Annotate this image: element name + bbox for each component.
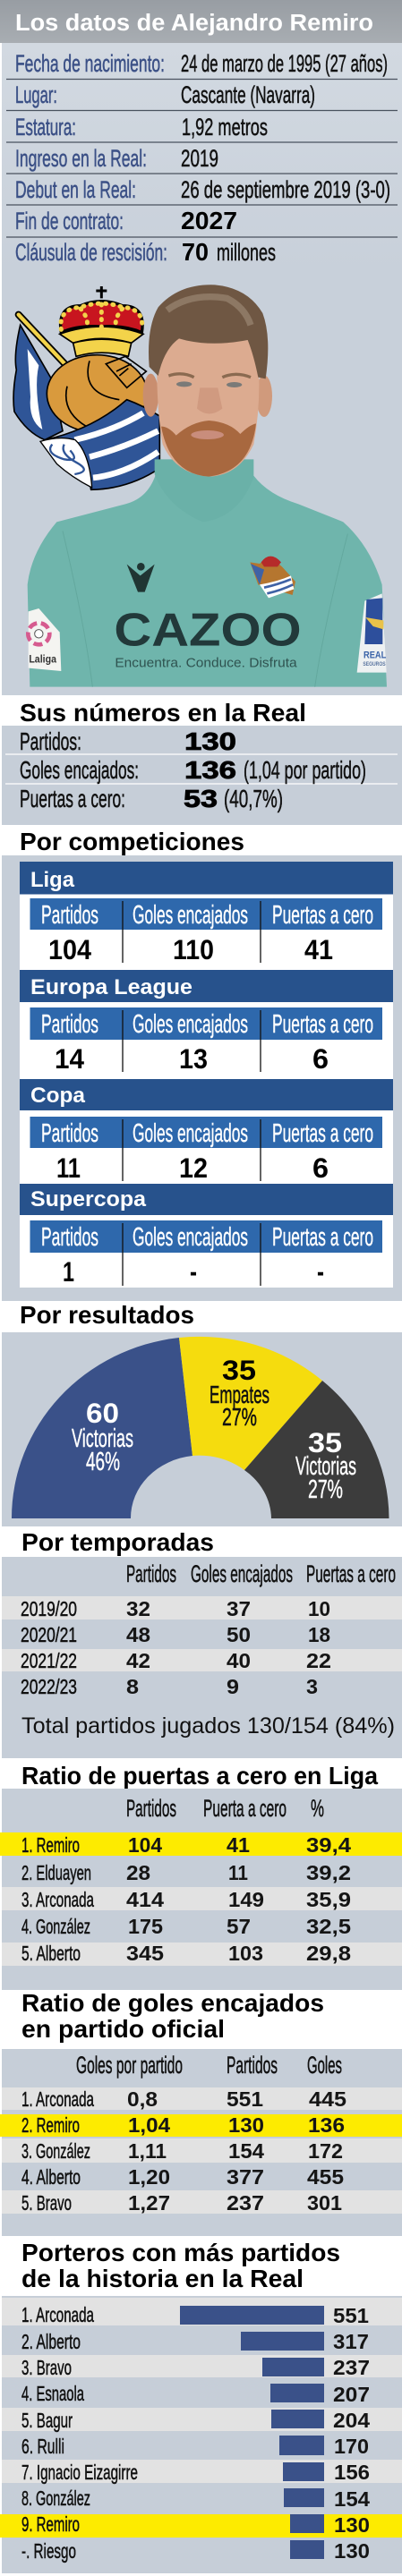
- panel: most appearances bar chart: 204: [333, 2409, 370, 2432]
- panel: player data: Ingreso en la Real:: [15, 145, 147, 172]
- panel: goals conceded ratio table: 3. González: [21, 2139, 90, 2163]
- section heading: Por temporadas: Por temporadas: [21, 1528, 214, 1556]
- panel: career numbers: Partidos:: [20, 727, 81, 755]
- panel: clean sheet ratio table: 39,2: [306, 1861, 351, 1884]
- panel: clean sheet ratio table: 3. Arconada: [21, 1888, 94, 1911]
- chart segment: derrotas: 35: [308, 1426, 342, 1458]
- panel: goals conceded ratio table: 154: [228, 2139, 264, 2163]
- panel: clean sheet ratio table: 103: [228, 1942, 263, 1965]
- panel: goals conceded ratio table: Partidos: [227, 2052, 278, 2079]
- panel: most appearances bar chart: 6. Rulli: [21, 2435, 64, 2458]
- panel: goals conceded ratio table: 1,27: [128, 2191, 170, 2215]
- panel: most appearances bar chart: 5. Bagur: [21, 2409, 73, 2432]
- table: Europa League: Europa League: [30, 975, 192, 999]
- table: Europa League: [20, 970, 393, 1075]
- panel: player data: Fin de contrato:: [15, 208, 124, 234]
- chart segment: victorias: 60: [86, 1397, 119, 1429]
- panel: player data: 2019: [181, 145, 218, 172]
- table: Supercopa: Partidos: [41, 1223, 98, 1252]
- panel: player data: 2027: [181, 207, 237, 234]
- panel: seasons table: 37: [227, 1597, 251, 1620]
- panel: seasons table: Goles encajados: [191, 1560, 293, 1587]
- panel: clean sheet ratio table: Puerta a cero: [203, 1795, 287, 1822]
- panel: seasons table: Total partidos jugados 130/154 (84%): [21, 1713, 395, 1739]
- table: Europa League: Goles encajados: [133, 1010, 248, 1039]
- section heading: Sus numeros en la Real: Sus números en la Real: [20, 699, 306, 727]
- panel: seasons table: Partidos: [126, 1560, 176, 1587]
- panel: clean sheet ratio table: 345: [126, 1942, 164, 1965]
- panel: player data: [2, 43, 402, 695]
- panel: goals conceded ratio table: 4. Alberto: [21, 2165, 81, 2189]
- panel: goals conceded ratio table: 1,20: [128, 2165, 170, 2189]
- table: Liga: 41: [304, 933, 333, 965]
- panel: most appearances bar chart: 170: [334, 2435, 369, 2458]
- table: Supercopa: -: [190, 1255, 197, 1288]
- panel: goals conceded ratio table: 5. Bravo: [21, 2191, 72, 2215]
- panel: goals conceded ratio table: 237: [227, 2191, 264, 2215]
- panel: seasons table: 48: [126, 1623, 150, 1646]
- chart segment: derrotas: [244, 1381, 389, 1518]
- table: Supercopa: Supercopa: [30, 1187, 146, 1211]
- panel: clean sheet ratio table: [0, 1789, 402, 1990]
- panel: career numbers: 136: [184, 756, 236, 784]
- icon: macron logo: [127, 565, 155, 592]
- section heading: Ratio de goles encajados: Ratio de goles encajados: [21, 1989, 324, 2017]
- table: Copa: 6: [312, 1152, 329, 1184]
- table: Europa League: 6: [312, 1042, 329, 1075]
- panel: seasons table: 2021/22: [21, 1649, 77, 1672]
- table: Copa: Partidos: [41, 1119, 98, 1148]
- bars: [180, 2306, 324, 2559]
- panel: clean sheet ratio table: 35,9: [306, 1888, 351, 1911]
- illustration: club crest and player: [13, 285, 387, 687]
- panel: career numbers: (40,7%): [224, 785, 283, 812]
- panel: goals conceded ratio table: 172: [308, 2139, 343, 2163]
- section heading: Ratio de puertas a cero en Liga: Ratio de puertas a cero en Liga: [21, 1762, 379, 1790]
- panel: career numbers: [2, 726, 402, 825]
- panel: seasons table: 8: [126, 1675, 139, 1698]
- panel: clean sheet ratio table: 39,4: [306, 1833, 351, 1857]
- panel: clean sheet ratio table: 32,5: [306, 1915, 351, 1938]
- chart segment: empates: 27%: [222, 1403, 257, 1431]
- chart segment: empates: [179, 1337, 322, 1470]
- panel: goals conceded ratio table: 377: [227, 2165, 264, 2189]
- section heading: Ratio de goles encajados: [21, 1989, 324, 2043]
- panel: player data: Cláusula de rescisión:: [15, 239, 167, 266]
- panel: goals conceded ratio table: 1,04: [128, 2113, 170, 2137]
- sponsor sleeve patch: [357, 593, 387, 673]
- chart segment: derrotas: Victorias: [295, 1452, 356, 1481]
- panel: seasons table: 3: [306, 1675, 318, 1698]
- panel: clean sheet ratio table: 57: [227, 1915, 251, 1938]
- shirt sponsor: Encuentra. Conduce. Disfruta: [115, 656, 298, 670]
- panel: clean sheet ratio table: 149: [228, 1888, 264, 1911]
- panel: player data: Lugar:: [15, 81, 57, 108]
- panel: player data: Estatura:: [15, 114, 76, 140]
- panel: seasons table: 9: [227, 1675, 239, 1698]
- panel: seasons table: 10: [308, 1597, 330, 1620]
- chart segment: victorias: 46%: [86, 1448, 120, 1476]
- panel: seasons table: 2019/20: [21, 1597, 77, 1620]
- panel: player data: millones: [217, 239, 276, 266]
- panel: most appearances bar chart: 317: [333, 2330, 369, 2353]
- panel: goals conceded ratio table: Goles: [307, 2052, 342, 2079]
- panel: clean sheet ratio table: 2. Elduayen: [21, 1861, 91, 1884]
- panel: results half-donut chart: [2, 1332, 402, 1526]
- panel: most appearances bar chart: 7. Ignacio Eizagirre: [21, 2461, 138, 2484]
- panel: goals conceded ratio table: 136: [308, 2113, 345, 2137]
- title header: [0, 0, 402, 43]
- panel: career numbers: 130: [184, 727, 236, 755]
- panel: player data: Cascante (Navarra): [181, 81, 315, 108]
- panel: career numbers: Goles encajados:: [20, 756, 139, 784]
- panel: seasons table: 32: [126, 1597, 150, 1620]
- panel: most appearances bar chart: -. Riesgo: [21, 2539, 76, 2563]
- chart segment: empates: 35: [222, 1354, 256, 1386]
- icon: Real Sociedad crest: [13, 286, 159, 489]
- panel: clean sheet ratio table: 4. González: [21, 1915, 90, 1938]
- table: Europa League: 14: [55, 1042, 84, 1075]
- panel: goals conceded ratio table: Goles por partido: [76, 2052, 183, 2079]
- panel: clean sheet ratio table: 5. Alberto: [21, 1942, 81, 1965]
- panel: goals conceded ratio table: 445: [309, 2087, 346, 2111]
- LaLiga sleeve patch: [28, 608, 61, 671]
- panel: clean sheet ratio table: 11: [228, 1861, 248, 1884]
- panel: clean sheet ratio table: 41: [227, 1833, 250, 1857]
- panel: goals conceded ratio table: [0, 2049, 402, 2236]
- panel: competitions: [2, 855, 402, 1301]
- table: Supercopa: [20, 1184, 393, 1288]
- chart segment: victorias: Victorias: [72, 1424, 133, 1453]
- panel: most appearances bar chart: 130: [334, 2513, 370, 2537]
- panel: most appearances bar chart: 3. Bravo: [21, 2356, 72, 2379]
- panel: goals conceded ratio table: 551: [227, 2087, 263, 2111]
- table: Europa League: Partidos: [41, 1010, 98, 1039]
- table: Europa League: 13: [179, 1042, 208, 1075]
- panel: seasons table: 50: [227, 1623, 251, 1646]
- panel: clean sheet ratio table: Partidos: [126, 1795, 176, 1822]
- table: Supercopa: -: [317, 1255, 324, 1288]
- panel: player data: 70: [182, 238, 209, 266]
- table: Liga: 110: [173, 933, 214, 965]
- table: Supercopa: Goles encajados: [133, 1223, 248, 1252]
- panel: most appearances bar chart: 154: [334, 2487, 370, 2511]
- table: Liga: [20, 862, 393, 965]
- panel: seasons table: 2022/23: [21, 1675, 77, 1698]
- panel: clean sheet ratio table: 28: [126, 1861, 150, 1884]
- panel: clean sheet ratio table: 29,8: [306, 1942, 351, 1965]
- panel: player data: Fecha de nacimiento:: [15, 50, 165, 77]
- panel: most appearances bar chart: 207: [333, 2383, 370, 2406]
- panel: most appearances bar chart: 551: [333, 2304, 369, 2327]
- panel: most appearances bar chart: [0, 2296, 402, 2573]
- LaLiga sleeve patch: Laliga: [29, 653, 56, 666]
- panel: most appearances bar chart: 2. Alberto: [21, 2330, 81, 2353]
- panel: clean sheet ratio table: 1. Remiro: [21, 1833, 80, 1857]
- chart segment: victorias: [12, 1338, 192, 1518]
- panel: most appearances bar chart: 1. Arconada: [21, 2303, 94, 2326]
- panel: goals conceded ratio table: 0,8: [127, 2087, 158, 2111]
- panel: player data: 1,92 metros: [182, 114, 268, 140]
- panel: goals conceded ratio table: 455: [307, 2165, 344, 2189]
- section heading: Por resultados: Por resultados: [20, 1301, 194, 1329]
- panel: career numbers: 53: [184, 785, 218, 812]
- table: Copa: 11: [56, 1152, 81, 1184]
- panel: most appearances bar chart: 237: [333, 2356, 370, 2379]
- panel: most appearances bar chart: 130: [334, 2539, 370, 2563]
- chart segment: derrotas: 27%: [308, 1475, 343, 1504]
- panel: seasons table: [2, 1557, 402, 1758]
- panel: seasons table: 42: [126, 1649, 150, 1672]
- panel: goals conceded ratio table: 1,11: [128, 2139, 167, 2163]
- panel: clean sheet ratio table: 104: [128, 1833, 162, 1857]
- shirt sponsor: [114, 604, 302, 670]
- section heading: Porteros con mas partidos: de la historia en la Real: [21, 2265, 304, 2292]
- table: Liga: 104: [48, 933, 91, 965]
- panel: goals conceded ratio table: 2. Remiro: [21, 2113, 80, 2137]
- table: Liga: Partidos: [41, 901, 98, 930]
- panel: clean sheet ratio table: 175: [128, 1915, 163, 1938]
- panel: goals conceded ratio table: 1. Arconada: [21, 2087, 94, 2111]
- icon: shirt crest: [250, 557, 295, 598]
- table: Copa: Goles encajados: [133, 1119, 248, 1148]
- panel: most appearances bar chart: 9. Remiro: [21, 2512, 80, 2536]
- panel: clean sheet ratio table: %: [311, 1795, 324, 1822]
- panel: goals conceded ratio table: 301: [307, 2191, 342, 2215]
- panel: player data: Debut en la Real:: [15, 176, 136, 203]
- player photo illustration: [28, 285, 387, 687]
- section heading: Porteros con mas partidos: Porteros con más partidos: [21, 2239, 340, 2266]
- panel: most appearances bar chart: 4. Esnaola: [21, 2382, 84, 2405]
- panel: clean sheet ratio table: 414: [126, 1888, 164, 1911]
- panel: most appearances bar chart: 156: [334, 2461, 370, 2484]
- section heading: Por competiciones: Por competiciones: [20, 828, 244, 855]
- panel: goals conceded ratio table: 130: [228, 2113, 264, 2137]
- sponsor sleeve patch: REAL: [364, 650, 386, 660]
- chart segment: empates: Empates: [210, 1381, 269, 1408]
- panel: seasons table: 18: [308, 1623, 330, 1646]
- table: Copa: [20, 1079, 393, 1184]
- title header: Los datos de Alejandro Remiro: [15, 11, 373, 36]
- table: Copa: 12: [179, 1152, 208, 1184]
- section heading: Ratio de goles encajados: en partido oficial: [21, 2015, 225, 2043]
- sponsor sleeve patch: SEGUROS: [363, 662, 386, 667]
- panel: seasons table: 40: [227, 1649, 251, 1672]
- panel: seasons table: 2020/21: [21, 1623, 77, 1646]
- table: Liga: Liga: [30, 868, 74, 892]
- panel: most appearances bar chart: 8. González: [21, 2487, 90, 2510]
- table: Liga: Goles encajados: [133, 901, 248, 930]
- table: Supercopa: 1: [63, 1255, 74, 1288]
- shirt sponsor: CAZOO: [114, 604, 302, 656]
- table: Copa: Copa: [30, 1084, 85, 1108]
- section heading: Porteros con mas partidos: [21, 2239, 340, 2292]
- panel: career numbers: Puertas a cero:: [20, 785, 125, 812]
- panel: seasons table: 22: [306, 1649, 331, 1672]
